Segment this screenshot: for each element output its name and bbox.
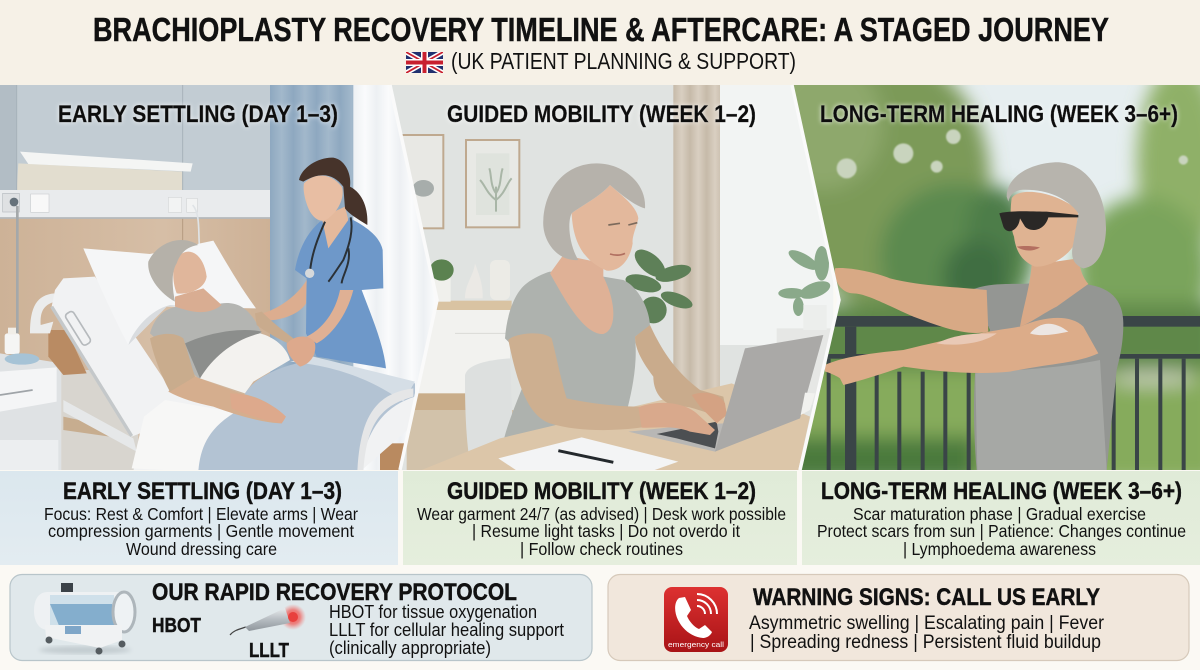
lower page band [0,470,1200,670]
caption heading: EARLY SETTLING (DAY 1–3) [63,478,342,505]
floor and bed base [62,370,138,472]
white torso wrap [200,333,290,393]
caption: guided mobility [403,471,797,565]
caption body: Scar maturation phase | Gradual exercise [853,504,1146,524]
curtains [673,85,720,402]
caption body: | Follow check routines [520,539,683,559]
face [572,185,638,271]
caption body [817,504,1186,559]
protocol description: (clinically appropriate) [329,638,491,658]
caption body [417,504,786,559]
label: LLLT: LLLT [249,640,289,662]
neck and scoop neckline [550,255,613,334]
protocol description: HBOT for tissue oxygenation [329,602,537,622]
patient arm with bandage [168,377,285,423]
patient hair [148,240,198,302]
caption body: Wear garment 24/7 (as advised) | Desk work possible [417,504,786,524]
neck and chest [1020,258,1088,327]
caption body [44,504,358,559]
rail with sockets [0,190,271,218]
icon: emergency call [664,587,728,652]
balcony railing [827,316,1200,470]
caption body: | Lymphoedema awareness [903,539,1096,559]
woman torso [972,283,1123,470]
photo: guided mobility, woman at laptop [390,85,833,472]
left sleeved arm [508,333,647,430]
nurse hair [299,158,367,225]
mattress [52,277,415,472]
caption: long-term healing [802,471,1200,565]
panel: rapid recovery protocol [10,574,592,662]
bed side rail [357,388,413,472]
blanket [198,360,415,472]
nurse stethoscope [310,217,352,283]
icon: LLLT laser device [230,604,306,635]
icon: HBOT chamber [34,583,135,654]
wall [0,85,273,192]
heading: guided mobility on photo: GUIDED MOBILITY (WEEK 1–2) [447,101,756,128]
caption body: Wound dressing care [126,539,277,559]
photo: early settling, patient and nurse in hospital [0,85,443,472]
right sleeved arm [635,325,727,415]
hair [543,163,645,260]
curtains [270,85,354,373]
caption body: | Resume light tasks | Do not overdo it [472,521,740,541]
wall art frames [402,135,443,228]
face [1011,192,1078,267]
big plant [626,250,692,324]
warning title: WARNING SIGNS: CALL US EARLY [753,584,1100,611]
white sheet fold [132,400,232,472]
laptop screen [715,335,823,452]
label: HBOT: HBOT [152,615,201,637]
caption: early settling [0,471,398,565]
hair [1007,162,1106,268]
warning text: | Spreading redness | Persistent fluid buildup [750,632,1101,653]
patient shirt [150,303,262,380]
chevron dividers between photos [390,85,839,470]
notepad [498,437,678,472]
warning text [749,613,1105,653]
hands [638,403,715,435]
laptop base [628,424,723,452]
patient neck [175,288,222,312]
shelf decor [465,263,483,298]
icon: UK flag [406,52,443,73]
table [422,383,810,470]
protocol description [329,602,564,658]
heading: early settling on photo: EARLY SETTLING (DAY 1–3) [58,101,338,128]
protocol title: OUR RAPID RECOVERY PROTOCOL [152,579,517,606]
nurse face [304,176,343,221]
icon: emergency call: emergency call [668,640,724,649]
panel: warning signs [608,574,1189,660]
headboard [30,293,55,333]
subtitle: (UK PATIENT PLANNING & SUPPORT) [451,48,796,74]
caption heading: GUIDED MOBILITY (WEEK 1–2) [447,478,756,505]
wood wainscot [0,218,271,472]
nightstand [0,353,62,472]
patient face [173,252,207,294]
pillow [83,241,256,345]
nurse arms [262,280,307,321]
sunglasses [999,211,1078,231]
photo: long-term healing, woman exercising outdoors [794,85,1200,470]
lower raised arm [825,318,1098,385]
warning text: Asymmetric swelling | Escalating pain | Fever [749,613,1105,634]
protocol description: LLLT for cellular healing support [329,620,564,640]
light fixture [20,152,193,172]
upper raised arm [835,268,988,333]
right plant [778,246,833,316]
header band [0,0,1200,85]
caption body: compression garments | Gentle movement [48,521,354,541]
shirt [503,272,650,442]
nurse scrubs [295,218,386,368]
sideboard [415,310,510,397]
caption body: Focus: Rest & Comfort | Elevate arms | Wear [44,504,358,524]
chair [465,358,513,452]
